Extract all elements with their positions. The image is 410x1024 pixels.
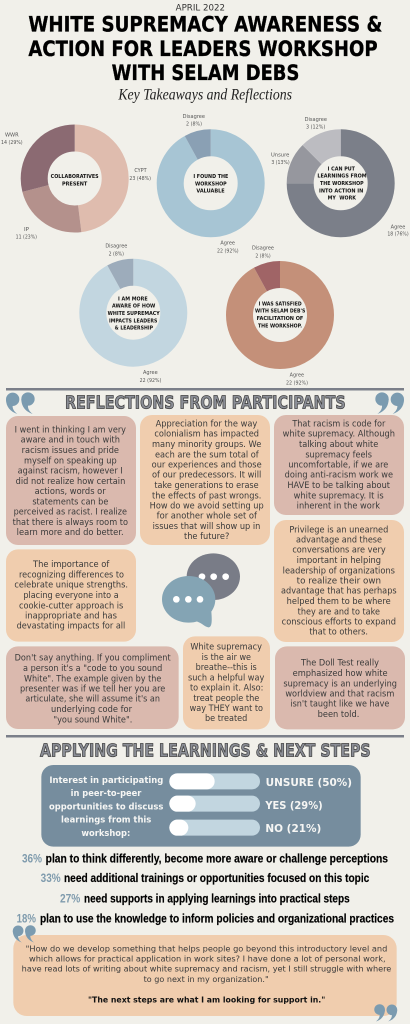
card: racism is code for white supremacy: That racism is code for (291, 419, 386, 429)
panel question text (49, 776, 163, 839)
card: closing quote: "The next steps are what I am looking for support in." (88, 995, 325, 1004)
card: appreciation for the way colonialism: for another whole set of (157, 512, 258, 522)
card: white supremacy is the air we breathe: treat people the (193, 694, 259, 704)
card: importance of recognizing differences: celebrate unique strengths. (14, 581, 128, 591)
donut chart: collaboratives present: PRESENT (62, 181, 88, 187)
card: went in thinking: racism issues and pride (22, 446, 119, 456)
card: went in thinking (6, 416, 136, 545)
card: the doll test (275, 646, 405, 729)
panel question text: learnings from this (61, 816, 151, 826)
card: privilege is an unearned advantage: they are and to take (298, 607, 380, 617)
card: appreciation for the way colonialism: take generations to erase (154, 481, 259, 491)
donut chart: found the workshop valuable: WORKSHOP (195, 181, 227, 187)
card: the doll test: emphasized how white (293, 669, 388, 679)
donut chart: can put learnings into action: THE WORKSHOP (320, 181, 364, 187)
donut chart: collaboratives present (1, 133, 151, 240)
donut chart: more aware of white supremacy impacts (93, 244, 174, 384)
donut chart: found the workshop valuable: Agree (220, 240, 235, 246)
card: appreciation for the way colonialism: issues that will show up in (153, 522, 260, 532)
stat: 33%: 33% (41, 871, 61, 885)
title (28, 13, 382, 86)
donut chart: satisfied with facilitation: I WAS SATISFIED (259, 301, 302, 307)
card: appreciation for the way colonialism: our experiences and those (152, 461, 262, 471)
card: don't say anything: a person it's a "code to you sound (23, 664, 162, 674)
card: don't say anything: Don't say anything. If you compliment (15, 654, 171, 664)
card: don't say anything: White". The example given by the (24, 674, 161, 684)
card: racism is code for white supremacy: talking about white (299, 440, 378, 450)
card: appreciation for the way colonialism: the effects of past wrongs. (152, 491, 261, 501)
card: closing quote (13, 935, 397, 1016)
card: racism is code for white supremacy: doing anti-racism work we (285, 471, 393, 481)
donut chart: more aware of white supremacy impacts: I AM MORE (118, 296, 148, 302)
card: don't say anything: "you sound White". (53, 715, 132, 725)
card: privilege is an unearned advantage: conscious efforts to expand (282, 617, 396, 627)
card: went in thinking: perceived as racist. I realize (14, 508, 127, 518)
donut chart: can put learnings into action: MY WORK (328, 196, 357, 202)
card: appreciation for the way colonialism: How do we avoid setting up (150, 502, 264, 512)
date: APRIL 2022 (176, 4, 225, 14)
donut chart: found the workshop valuable: I FOUND THE (193, 174, 229, 180)
card: privilege is an unearned advantage: helped them to be where (287, 597, 391, 607)
icon: speech bubbles (162, 553, 240, 627)
donut chart: found the workshop valuable (170, 114, 251, 254)
bar: unsure: UNSURE (50%) (266, 776, 352, 789)
card: don't say anything: articulate, she will assume it's an (25, 695, 160, 705)
donut chart: found the workshop valuable: VALUABLE (196, 189, 225, 195)
donut chart: collaboratives present: 23 (48%) (129, 176, 151, 182)
card: appreciation for the way colonialism: the future? (184, 532, 229, 542)
icon: closing card left quotation mark (13, 925, 36, 943)
donut chart: more aware of white supremacy impacts: AWARE OF HOW (112, 304, 156, 310)
donut chart: collaboratives present: WWR (5, 133, 19, 139)
card: went in thinking: aware and in touch with (21, 436, 120, 446)
donut chart: collaboratives present: COLLABORATIVES (51, 174, 99, 180)
donut chart: satisfied with facilitation: FACILITATION OF (257, 316, 304, 322)
card: went in thinking: learn more and do better. (17, 528, 124, 538)
card: went in thinking: myself on speaking up (24, 456, 117, 466)
stat: 18%: 18% (17, 911, 36, 925)
card: racism is code for white supremacy: uncomfortable, if we are (288, 461, 388, 471)
card: importance of recognizing differences: placing everyone into a (23, 591, 119, 601)
card: the doll test: isn't taught like we have (290, 700, 389, 710)
card: white supremacy is the air we breathe: breathe--this is (196, 663, 257, 673)
donut chart: satisfied with facilitation: 2 (8%) (255, 253, 271, 259)
donut chart: can put learnings into action: Disagree (305, 117, 327, 123)
bar: no: NO (21%) (265, 822, 321, 835)
card: white supremacy is the air we breathe (183, 636, 270, 729)
card: white supremacy is the air we breathe: is the air we (202, 653, 251, 663)
donut chart: found the workshop valuable: 2 (8%) (186, 122, 202, 128)
title: WITH SELAM DEBS (112, 61, 299, 86)
donut chart: found the workshop valuable: Disagree (183, 114, 205, 120)
card: went in thinking: statements can be (32, 497, 108, 507)
card: don't say anything: underlying code for (51, 705, 132, 715)
card: appreciation for the way colonialism: colonialism has impacted (154, 430, 259, 440)
card: white supremacy is the air we breathe: to explain it. Also: (190, 684, 263, 694)
card: the doll test: supremacy is an underlying (283, 679, 397, 689)
icon: left quotation mark (6, 392, 35, 414)
heading: reflections from participants: REFLECTIONS FROM PARTICIPANTS (65, 393, 346, 413)
donut chart: more aware of white supremacy impacts: IMPACTS LEADERS (109, 318, 158, 324)
card: privilege is an unearned advantage: advantage and these (296, 536, 382, 546)
card: privilege is an unearned advantage: conversations are very (292, 546, 386, 556)
donut chart: can put learnings into action: 3 (13%) (271, 160, 290, 166)
donut chart: satisfied with facilitation: 22 (92%) (286, 380, 308, 386)
card: importance of recognizing differences: inappropriate and has (25, 611, 117, 621)
card: closing quote: have read lots of writing about white supremacy and racism, yet I still struggle with where (22, 965, 391, 974)
donut chart: satisfied with facilitation: Agree (290, 373, 304, 379)
card: went in thinking: I went in thinking I am very (15, 426, 126, 436)
card: white supremacy is the air we breathe: be treated (205, 714, 247, 724)
panel question text: workshop: (81, 829, 130, 839)
card: went in thinking: against racism, however I (18, 467, 123, 477)
donut chart: more aware of white supremacy impacts: 2 (8%) (109, 251, 124, 257)
panel question text: in peer-to-peer (71, 789, 142, 799)
card: privilege is an unearned advantage: important in helping (297, 556, 381, 566)
card: privilege is an unearned advantage (274, 520, 404, 642)
bar: yes (169, 796, 323, 812)
bar: yes: YES (29%) (264, 799, 323, 812)
donut chart: can put learnings into action: Agree (391, 224, 405, 230)
donut chart: more aware of white supremacy impacts: Agree (143, 370, 158, 376)
card: closing quote: "How do we develop something that helps people go beyond this introductory level and (26, 944, 387, 953)
donut chart: collaboratives present: 14 (29%) (1, 140, 23, 146)
card: appreciation for the way colonialism: Appreciation for the way (156, 419, 257, 429)
donut chart: collaboratives present: 11 (23%) (16, 234, 37, 240)
card: don't say anything: presenter was if we tell her you are (20, 685, 165, 695)
card: importance of recognizing differences: recognizing differences to (19, 570, 124, 580)
donut chart: can put learnings into action (271, 117, 409, 238)
card: racism is code for white supremacy: white supremacy. Although (283, 430, 395, 440)
donut chart: satisfied with facilitation: Disagree (252, 246, 274, 252)
donut chart: can put learnings into action: LEARNINGS FROM (317, 174, 367, 180)
card: importance of recognizing differences (6, 549, 136, 642)
card: racism is code for white supremacy: HAVE to be talking about (287, 481, 391, 491)
donut chart: collaboratives present: CYPT (134, 168, 147, 174)
donut chart: satisfied with facilitation (240, 246, 320, 386)
subtitle: Key Takeaways and Reflections (117, 87, 292, 104)
donut chart: can put learnings into action: Unsure (271, 152, 289, 158)
card: privilege is an unearned advantage: that to others. (309, 628, 368, 638)
card: appreciation for the way colonialism: of our predecessors. It will (152, 471, 261, 481)
card: appreciation for the way colonialism (140, 415, 270, 545)
card: went in thinking: that there is always room to (13, 518, 128, 528)
donut chart: more aware of white supremacy impacts: Disagree (105, 244, 127, 250)
card: importance of recognizing differences: cookie-cutter approach is (19, 601, 124, 611)
donut chart: can put learnings into action: I CAN PUT (328, 166, 355, 172)
donut chart: collaboratives present: IP (24, 227, 30, 233)
header: date, title and subtitle (28, 4, 382, 104)
card: racism is code for white supremacy: white supremacy. It is (294, 491, 384, 501)
card: privilege is an unearned advantage: advantage that has perhaps (281, 587, 397, 597)
icon: closing card right quotation mark (374, 1004, 397, 1022)
stat: 27%: need supports in applying learnings into practical steps (84, 891, 350, 905)
card: white supremacy is the air we breathe: White supremacy (190, 643, 262, 653)
card: appreciation for the way colonialism: each are the sum total of (155, 450, 260, 460)
card: racism is code for white supremacy: inherent in the work (297, 501, 380, 511)
card: privilege is an unearned advantage: leadership of organizations (283, 566, 395, 576)
card: the doll test: The Doll Test really (300, 659, 379, 669)
donut chart: satisfied with facilitation: WITH SELAM DEB'S (255, 309, 306, 315)
card: white supremacy is the air we breathe: way THEY want to (190, 704, 263, 714)
card: racism is code for white supremacy (274, 415, 404, 515)
card: appreciation for the way colonialism: many minority groups. We (152, 440, 261, 450)
panel: peer-to-peer interest (41, 765, 361, 847)
card: importance of recognizing differences: devastating impacts for all (17, 622, 125, 632)
card: importance of recognizing differences: The importance of (32, 560, 110, 570)
panel question text: Interest in participating (49, 776, 163, 786)
card: closing quote: to go next in my organization." (144, 975, 269, 984)
card: went in thinking: actions, words or (35, 487, 106, 497)
card: closing quote: which allows for practical application in work sites? I have done a lot of personal work, (29, 954, 386, 963)
bar: unsure (169, 773, 352, 789)
bar: no (169, 820, 321, 836)
donut chart: more aware of white supremacy impacts: 22 (92%) (140, 378, 161, 384)
donut chart: can put learnings into action: INTO ACTION IN (319, 188, 363, 194)
next steps section (22, 742, 388, 865)
card: don't say anything (6, 646, 179, 729)
donut chart: satisfied with facilitation: THE WORKSHOP. (258, 323, 302, 329)
card: racism is code for white supremacy: supremacy feels (305, 450, 372, 460)
donut chart: found the workshop valuable: 22 (92%) (217, 248, 239, 254)
panel question text: opportunities to discuss (49, 802, 163, 812)
donut chart: more aware of white supremacy impacts: & LEADERSHIP (115, 326, 153, 332)
icon: right quotation mark (375, 392, 404, 414)
stat: 27%: 27% (60, 891, 81, 905)
card: privilege is an unearned advantage: Privilege is an unearned (289, 525, 388, 535)
card: privilege is an unearned advantage: to realize their own (297, 577, 381, 587)
reflections section (6, 392, 404, 642)
card: the doll test: been told. (318, 710, 359, 720)
card: the doll test: worldview and that racism (285, 690, 394, 700)
donut chart: more aware of white supremacy impacts: WHITE SUPREMACY (108, 311, 160, 317)
card: went in thinking: did not realize how certain (16, 477, 125, 487)
donut chart: can put learnings into action: 3 (12%) (306, 125, 325, 131)
stat: 36%: 36% (22, 851, 42, 865)
card: white supremacy is the air we breathe: such a helpful way (188, 673, 264, 683)
